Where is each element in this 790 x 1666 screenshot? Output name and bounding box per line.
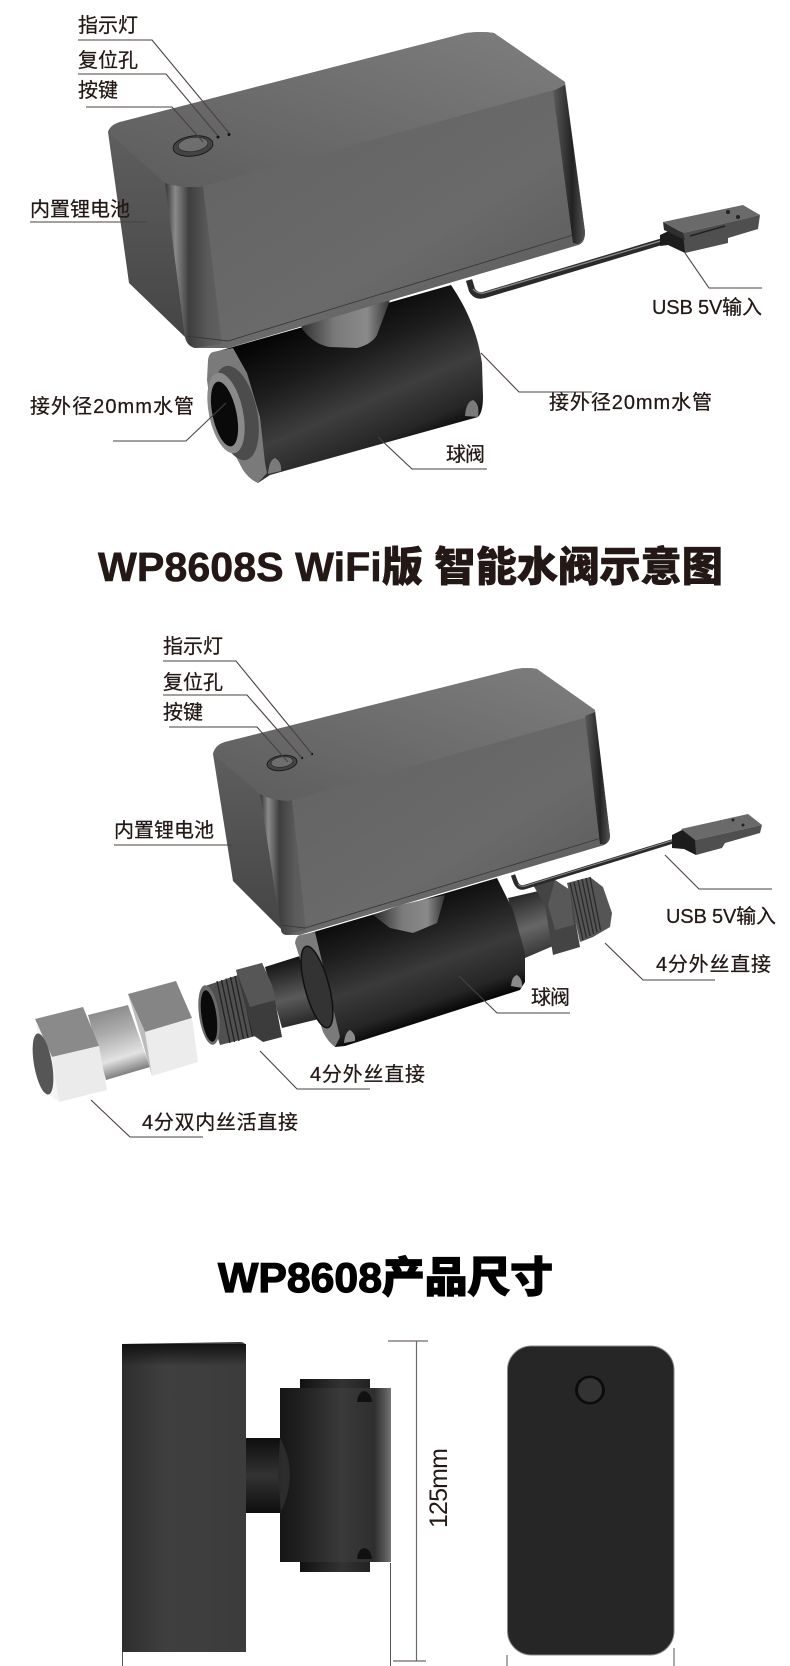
icon: button and indicator holes (266, 753, 313, 773)
controller housing (108, 32, 585, 348)
USB cable and connector (513, 814, 762, 888)
valve body cylinder (295, 878, 525, 1047)
label: indicator light: 指示灯 (78, 14, 138, 37)
label: built-in lithium battery: 内置锂电池 (30, 198, 130, 221)
label: indicator light (78, 14, 229, 133)
icon: button (575, 1376, 605, 1404)
panel: fitting exploded diagram (29, 635, 776, 1137)
label: button: 按键 (78, 79, 118, 102)
union fitting (29, 981, 198, 1102)
label: button (163, 701, 288, 762)
USB cable and connector (469, 205, 760, 295)
label: ball valve: 球阀 (446, 443, 485, 466)
right threaded connector (508, 877, 612, 958)
label: left male connector (260, 1051, 425, 1089)
label: USB 5V input (665, 855, 776, 928)
dimension line: 125mm (122, 1341, 674, 1666)
label: button (78, 79, 203, 142)
heading: product dimensions: WP8608产品尺寸 (218, 1254, 553, 1301)
label: right male connector (605, 943, 771, 980)
panel: valve overview diagram (30, 14, 762, 483)
label: button: 按键 (163, 701, 203, 724)
label: left 20mm pipe (30, 395, 226, 441)
heading: WiFi valve diagram title: WP8608S WiFi版 智能水阀示意图 (98, 544, 723, 590)
panel: dimensions drawing (122, 1341, 674, 1666)
label: ball valve: 球阀 (531, 986, 570, 1009)
label: indicator light: 指示灯 (163, 635, 223, 658)
label: reset hole: 复位孔 (163, 671, 223, 694)
label: USB 5V input (652, 253, 762, 319)
valve body cylinder (201, 285, 483, 483)
flange plate (295, 932, 340, 1047)
label: double female union (91, 1100, 298, 1137)
label: reset hole: 复位孔 (78, 49, 138, 72)
shaft stem (298, 300, 390, 348)
flange plate (207, 348, 267, 483)
label: right male connector: 4分外丝直接 (656, 953, 771, 976)
label: ball valve (378, 437, 487, 469)
label: ball valve (459, 976, 570, 1013)
label: indicator light (163, 635, 312, 754)
label: reset hole (163, 671, 302, 758)
shaft stem (373, 895, 445, 933)
side view of valve (122, 1342, 391, 1652)
label: left 20mm pipe: 接外径20mm水管 (30, 395, 194, 418)
label: reset hole (78, 49, 218, 136)
label: right 20mm pipe (481, 353, 712, 414)
label: USB 5V input: USB 5V输入 (666, 905, 776, 928)
label: right 20mm pipe: 接外径20mm水管 (549, 391, 712, 414)
controller housing (213, 668, 610, 935)
label: left male connector: 4分外丝直接 (310, 1063, 425, 1086)
left threaded connector (195, 955, 327, 1046)
label: USB 5V input: USB 5V输入 (652, 296, 762, 319)
dimension label: 125mm (425, 1448, 453, 1528)
front view of housing (508, 1346, 674, 1655)
icon: button and indicator holes (172, 133, 230, 159)
label: double female union: 4分双内丝活直接 (142, 1111, 298, 1134)
label: built-in lithium battery: 内置锂电池 (114, 819, 214, 842)
